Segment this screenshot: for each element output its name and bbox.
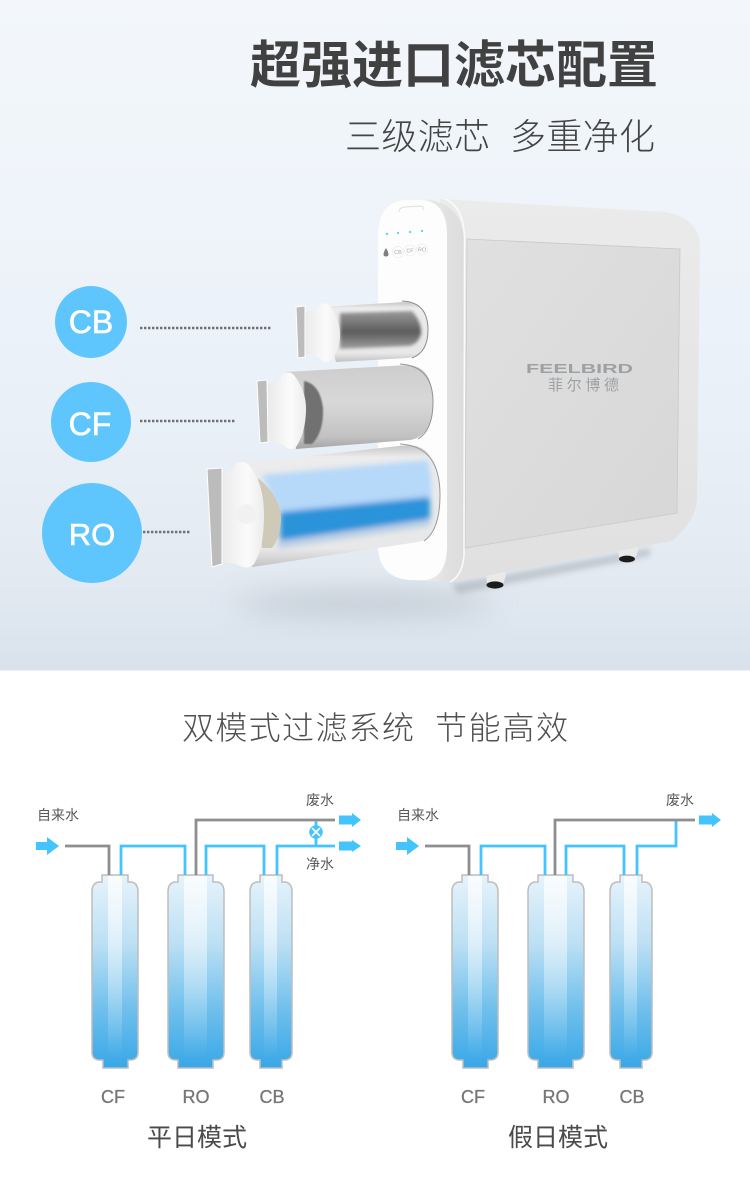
diagram: weekday mode	[36, 792, 361, 1152]
callout: RO	[42, 483, 191, 583]
labels: cartridges	[101, 1087, 285, 1107]
subtitle	[345, 116, 655, 157]
brand logo: FEELBIRD	[526, 361, 633, 376]
device feet	[486, 544, 640, 589]
cartridge diagram CB	[250, 875, 292, 1068]
underside shadow	[452, 548, 650, 594]
cartridge diagram RO	[168, 875, 224, 1068]
diagram: holiday mode	[396, 792, 721, 1152]
arrow: waste outlet	[339, 813, 361, 827]
subtitle: 多重净化	[510, 116, 655, 157]
device front panel	[378, 200, 447, 580]
cartridge diagram CF	[92, 875, 138, 1068]
labels: cartridges: CB	[619, 1087, 645, 1107]
indicator panel: CF	[406, 248, 414, 254]
callout: RO: RO	[69, 517, 115, 552]
title: 超强进口滤芯配置	[250, 37, 658, 94]
labels: water types	[37, 792, 334, 872]
arrow: waste outlet	[699, 813, 721, 827]
labels: cartridges: RO	[542, 1087, 570, 1107]
labels: cartridges: RO	[182, 1087, 210, 1107]
section heading	[182, 710, 568, 746]
arrow: inlet	[36, 837, 59, 855]
hero background panel	[0, 0, 750, 670]
indicator panel: RO	[418, 248, 427, 254]
membrane blue	[262, 460, 432, 549]
labels: water types: 自来水	[397, 807, 439, 823]
labels: water types: 废水	[306, 792, 334, 808]
pipes: filtered water	[121, 821, 335, 875]
section heading: 节能高效	[435, 710, 568, 746]
labels: cartridges: CF	[461, 1087, 485, 1107]
cartridge diagram CF	[452, 875, 498, 1068]
indicator panel	[384, 230, 428, 258]
cartridge RO	[207, 444, 440, 568]
floor shadow	[235, 592, 495, 616]
cartridge diagram CB	[610, 875, 652, 1068]
indicator panel: CB	[394, 250, 402, 256]
labels: cartridges	[461, 1087, 645, 1107]
caption: holiday mode: 假日模式	[508, 1124, 608, 1152]
callout: CF	[51, 382, 235, 462]
callout: CB	[55, 286, 272, 358]
brand logo	[526, 361, 633, 394]
subtitle: 三级滤芯	[345, 116, 490, 157]
labels: water types: 自来水	[37, 807, 79, 823]
pipes: raw and waste water	[65, 820, 335, 875]
cartridge CF	[257, 364, 433, 449]
pipes: raw and waste water	[425, 820, 695, 875]
callout: CB: CB	[69, 304, 113, 340]
section heading: 双模式过滤系统	[182, 710, 414, 746]
labels: cartridges: CF	[101, 1087, 125, 1107]
icon: valve	[309, 825, 323, 839]
device body	[400, 199, 700, 582]
labels: water types: 废水	[666, 792, 694, 808]
cartridge CB	[296, 301, 428, 362]
pipes: filtered water	[481, 820, 676, 875]
device side panel	[465, 239, 680, 548]
brand logo: 菲尔博德	[548, 376, 619, 394]
labels: water types	[397, 792, 694, 823]
device edge highlight	[445, 199, 464, 582]
arrow: inlet	[396, 837, 419, 855]
cartridge diagram RO	[528, 875, 584, 1068]
callout: CF: CF	[69, 406, 111, 442]
labels: water types: 净水	[306, 856, 334, 872]
caption: weekday mode: 平日模式	[147, 1124, 247, 1152]
device side band	[410, 199, 464, 582]
product: water purifier	[207, 199, 700, 594]
labels: cartridges: CB	[259, 1087, 285, 1107]
arrow: pure outlet	[339, 840, 361, 852]
handle recess	[399, 206, 423, 212]
